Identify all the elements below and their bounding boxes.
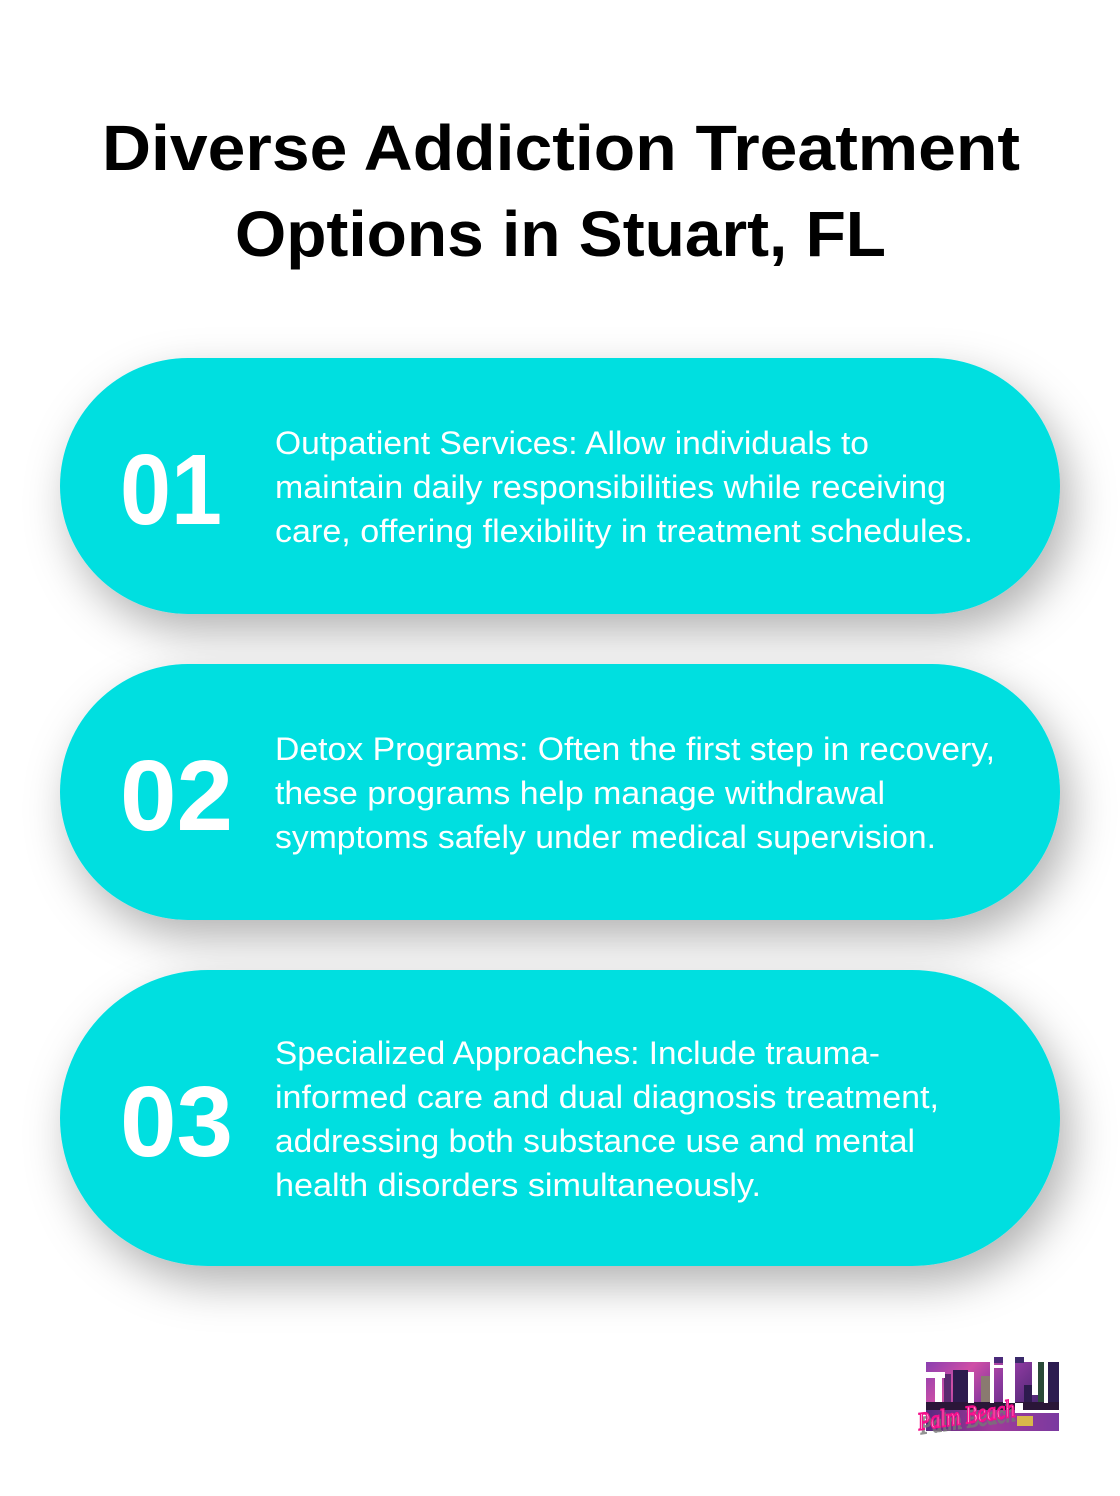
panel: detox programs xyxy=(60,664,1060,920)
text: detox programs description xyxy=(275,731,995,855)
text: outpatient services description xyxy=(275,425,973,549)
text: detox programs description: these programs help manage withdrawal xyxy=(275,775,885,811)
text: specialized approaches description: health disorders simultaneously. xyxy=(275,1167,761,1203)
text: specialized approaches description: Specialized Approaches: Include trauma- xyxy=(275,1035,880,1071)
number 03: 03 xyxy=(120,1066,233,1178)
number 02: 02 xyxy=(120,740,233,852)
text: detox programs description: Detox Programs: Often the first step in recovery, xyxy=(275,731,995,767)
panel: specialized approaches xyxy=(60,970,1060,1266)
panel: outpatient services xyxy=(60,358,1060,614)
title: Diverse Addiction Treatment xyxy=(102,112,1020,184)
title xyxy=(102,112,1020,270)
icon: Amity Palm Beach logo: Palm Beach xyxy=(917,1400,1017,1440)
icon: Amity Palm Beach logo: Palm Beach xyxy=(915,1396,1017,1436)
title: Options in Stuart, FL xyxy=(235,198,886,270)
text: detox programs description: symptoms safely under medical supervision. xyxy=(275,819,936,855)
text: outpatient services description: maintain daily responsibilities while receiving xyxy=(275,469,946,505)
text: specialized approaches description xyxy=(275,1035,939,1203)
text: outpatient services description: Outpatient Services: Allow individuals to xyxy=(275,425,869,461)
number 01: 01 xyxy=(120,434,222,546)
icon: Amity Palm Beach logo xyxy=(915,1357,1059,1440)
text: specialized approaches description: addressing both substance use and mental xyxy=(275,1123,915,1159)
text: specialized approaches description: informed care and dual diagnosis treatment, xyxy=(275,1079,939,1115)
text: outpatient services description: care, offering flexibility in treatment schedules. xyxy=(275,513,973,549)
